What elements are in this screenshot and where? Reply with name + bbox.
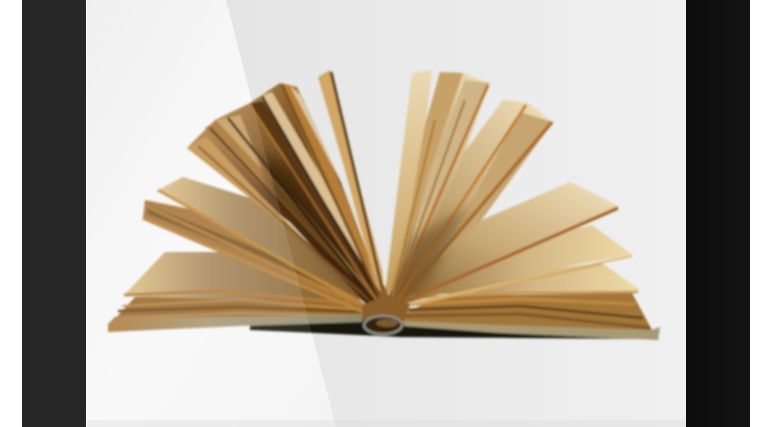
left upper page fan: [187, 83, 388, 310]
book spine ring: [364, 316, 402, 334]
screen glare reflection: [87, 0, 336, 427]
dark base of right pages: [388, 205, 470, 306]
dark shadow inside fan: [262, 150, 372, 300]
open book: [108, 70, 660, 340]
tablet screen: [87, 0, 686, 427]
book shadow: [250, 318, 655, 339]
left lower page fan: [143, 177, 380, 314]
book cover edge left: [108, 315, 362, 332]
book cover edge right: [404, 321, 660, 340]
tablet right bezel: [686, 0, 750, 427]
glare over left of book: [87, 0, 336, 427]
screen bottom edge: [87, 420, 686, 427]
right lower page fan: [392, 182, 633, 308]
tablet left bezel: [22, 0, 86, 427]
single raised left page: [318, 70, 386, 304]
left flat pages: [112, 252, 376, 326]
right upper page fan: [385, 70, 553, 306]
right lower flat pages: [392, 263, 660, 340]
gutter between left and right pages: [362, 285, 410, 320]
